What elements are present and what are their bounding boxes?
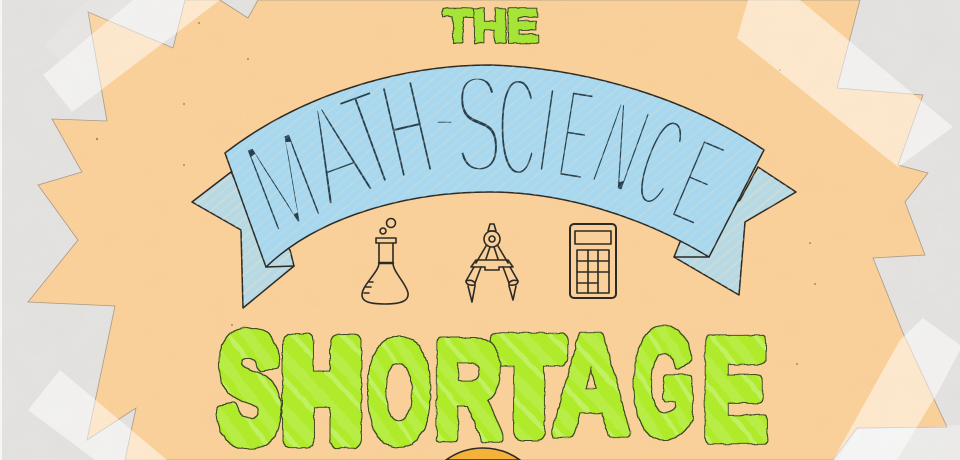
ribbon heading: MATH-SCIENCE: C (620, 88, 700, 236)
ribbon banner (192, 44, 796, 308)
ribbon heading: MATH-SCIENCE: E (655, 111, 740, 254)
ribbon heading: MATH-SCIENCE: M (228, 101, 339, 263)
tape: bottom right lower strip (838, 425, 960, 460)
ribbon heading: MATH-SCIENCE: E (550, 60, 602, 210)
letter A: A (553, 308, 629, 460)
letter G: G (634, 302, 694, 460)
ribbon heading: MATH-SCIENCE: N (576, 74, 665, 222)
tape: bottom right (833, 318, 960, 460)
ribbon right fold line (674, 256, 709, 258)
ribbon heading: MATH-SCIENCE: I (530, 58, 564, 202)
ribbon left fold line (266, 266, 294, 267)
ribbon heading: MATH-SCIENCE: H (369, 47, 446, 212)
ribbon heading: MATH-SCIENCE: C (497, 47, 537, 207)
letter T: T (497, 315, 561, 458)
ribbon heading: MATH-SCIENCE: S (452, 44, 504, 204)
title word: SHORTAGE (218, 302, 766, 460)
title word: THE: THE (444, 1, 538, 51)
tape: bottom left (28, 370, 167, 460)
ribbon heading: MATH-SCIENCE: A (283, 67, 387, 238)
ribbon pencil texture (225, 65, 764, 267)
icon: calculator (570, 224, 616, 298)
icon: flask (362, 218, 408, 304)
tape: top left corner strip (45, 0, 133, 60)
tape: top right (737, 0, 953, 167)
ribbon left tail (192, 172, 294, 308)
orange circle at bottom edge (446, 448, 520, 460)
ribbon main band (225, 65, 764, 267)
ribbon heading: MATH-SCIENCE (248, 72, 724, 230)
ribbon heading: MATH-SCIENCE: T (325, 59, 415, 220)
icon: drafting compass (466, 224, 518, 302)
ribbon right tail (674, 167, 796, 295)
paper specks (96, 22, 816, 365)
tape: top left (43, 0, 220, 112)
ribbon heading: MATH-SCIENCE: - (432, 85, 457, 151)
